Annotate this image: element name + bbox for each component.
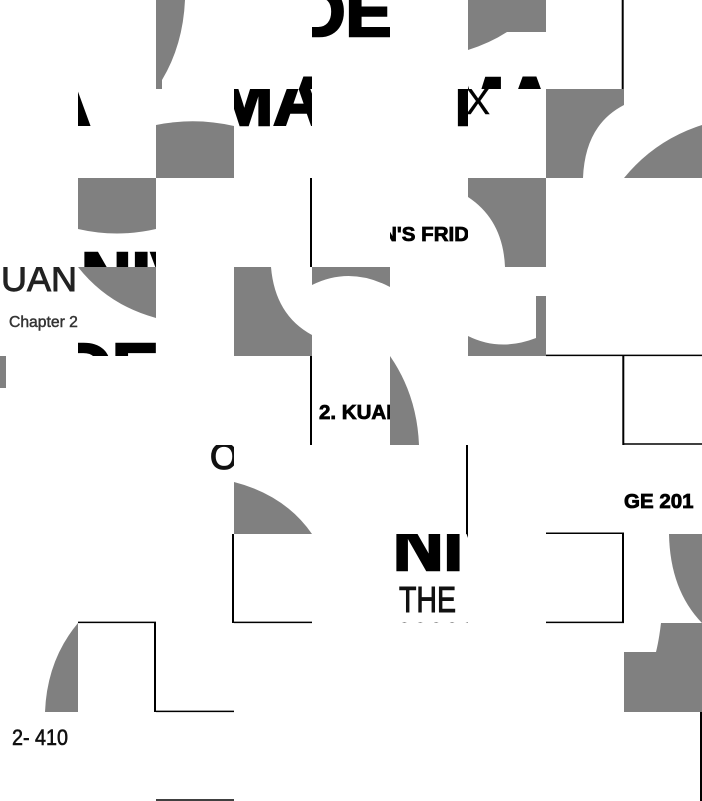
page reference 2-410: 2- 410 <box>12 725 68 750</box>
heading fragment: 2. Kuan: 2. KUAN <box>319 401 401 424</box>
word THE: THE <box>399 579 456 620</box>
clipped letter tops under THE: OOOOO <box>399 619 478 635</box>
title fragments: MA <box>215 62 324 140</box>
course code GE 201: GE 201 <box>624 490 694 513</box>
letter X fragment: X <box>466 81 490 122</box>
title fragments <box>78 0 541 572</box>
title fragments: NIV <box>393 507 510 585</box>
heading fragment: Kuan's Friday: N'S FRID <box>382 223 469 246</box>
chapter label: Chapter 2 <box>9 314 78 331</box>
title fragments: A <box>285 63 336 141</box>
title fragments: A <box>40 62 91 140</box>
title fragments: MA <box>446 63 555 141</box>
title fragments: NIV <box>81 238 198 316</box>
title fragments: O <box>345 77 399 155</box>
letter O fragment: O <box>210 436 238 477</box>
title fragments: DE <box>62 329 159 407</box>
title fragments: M <box>454 62 513 140</box>
